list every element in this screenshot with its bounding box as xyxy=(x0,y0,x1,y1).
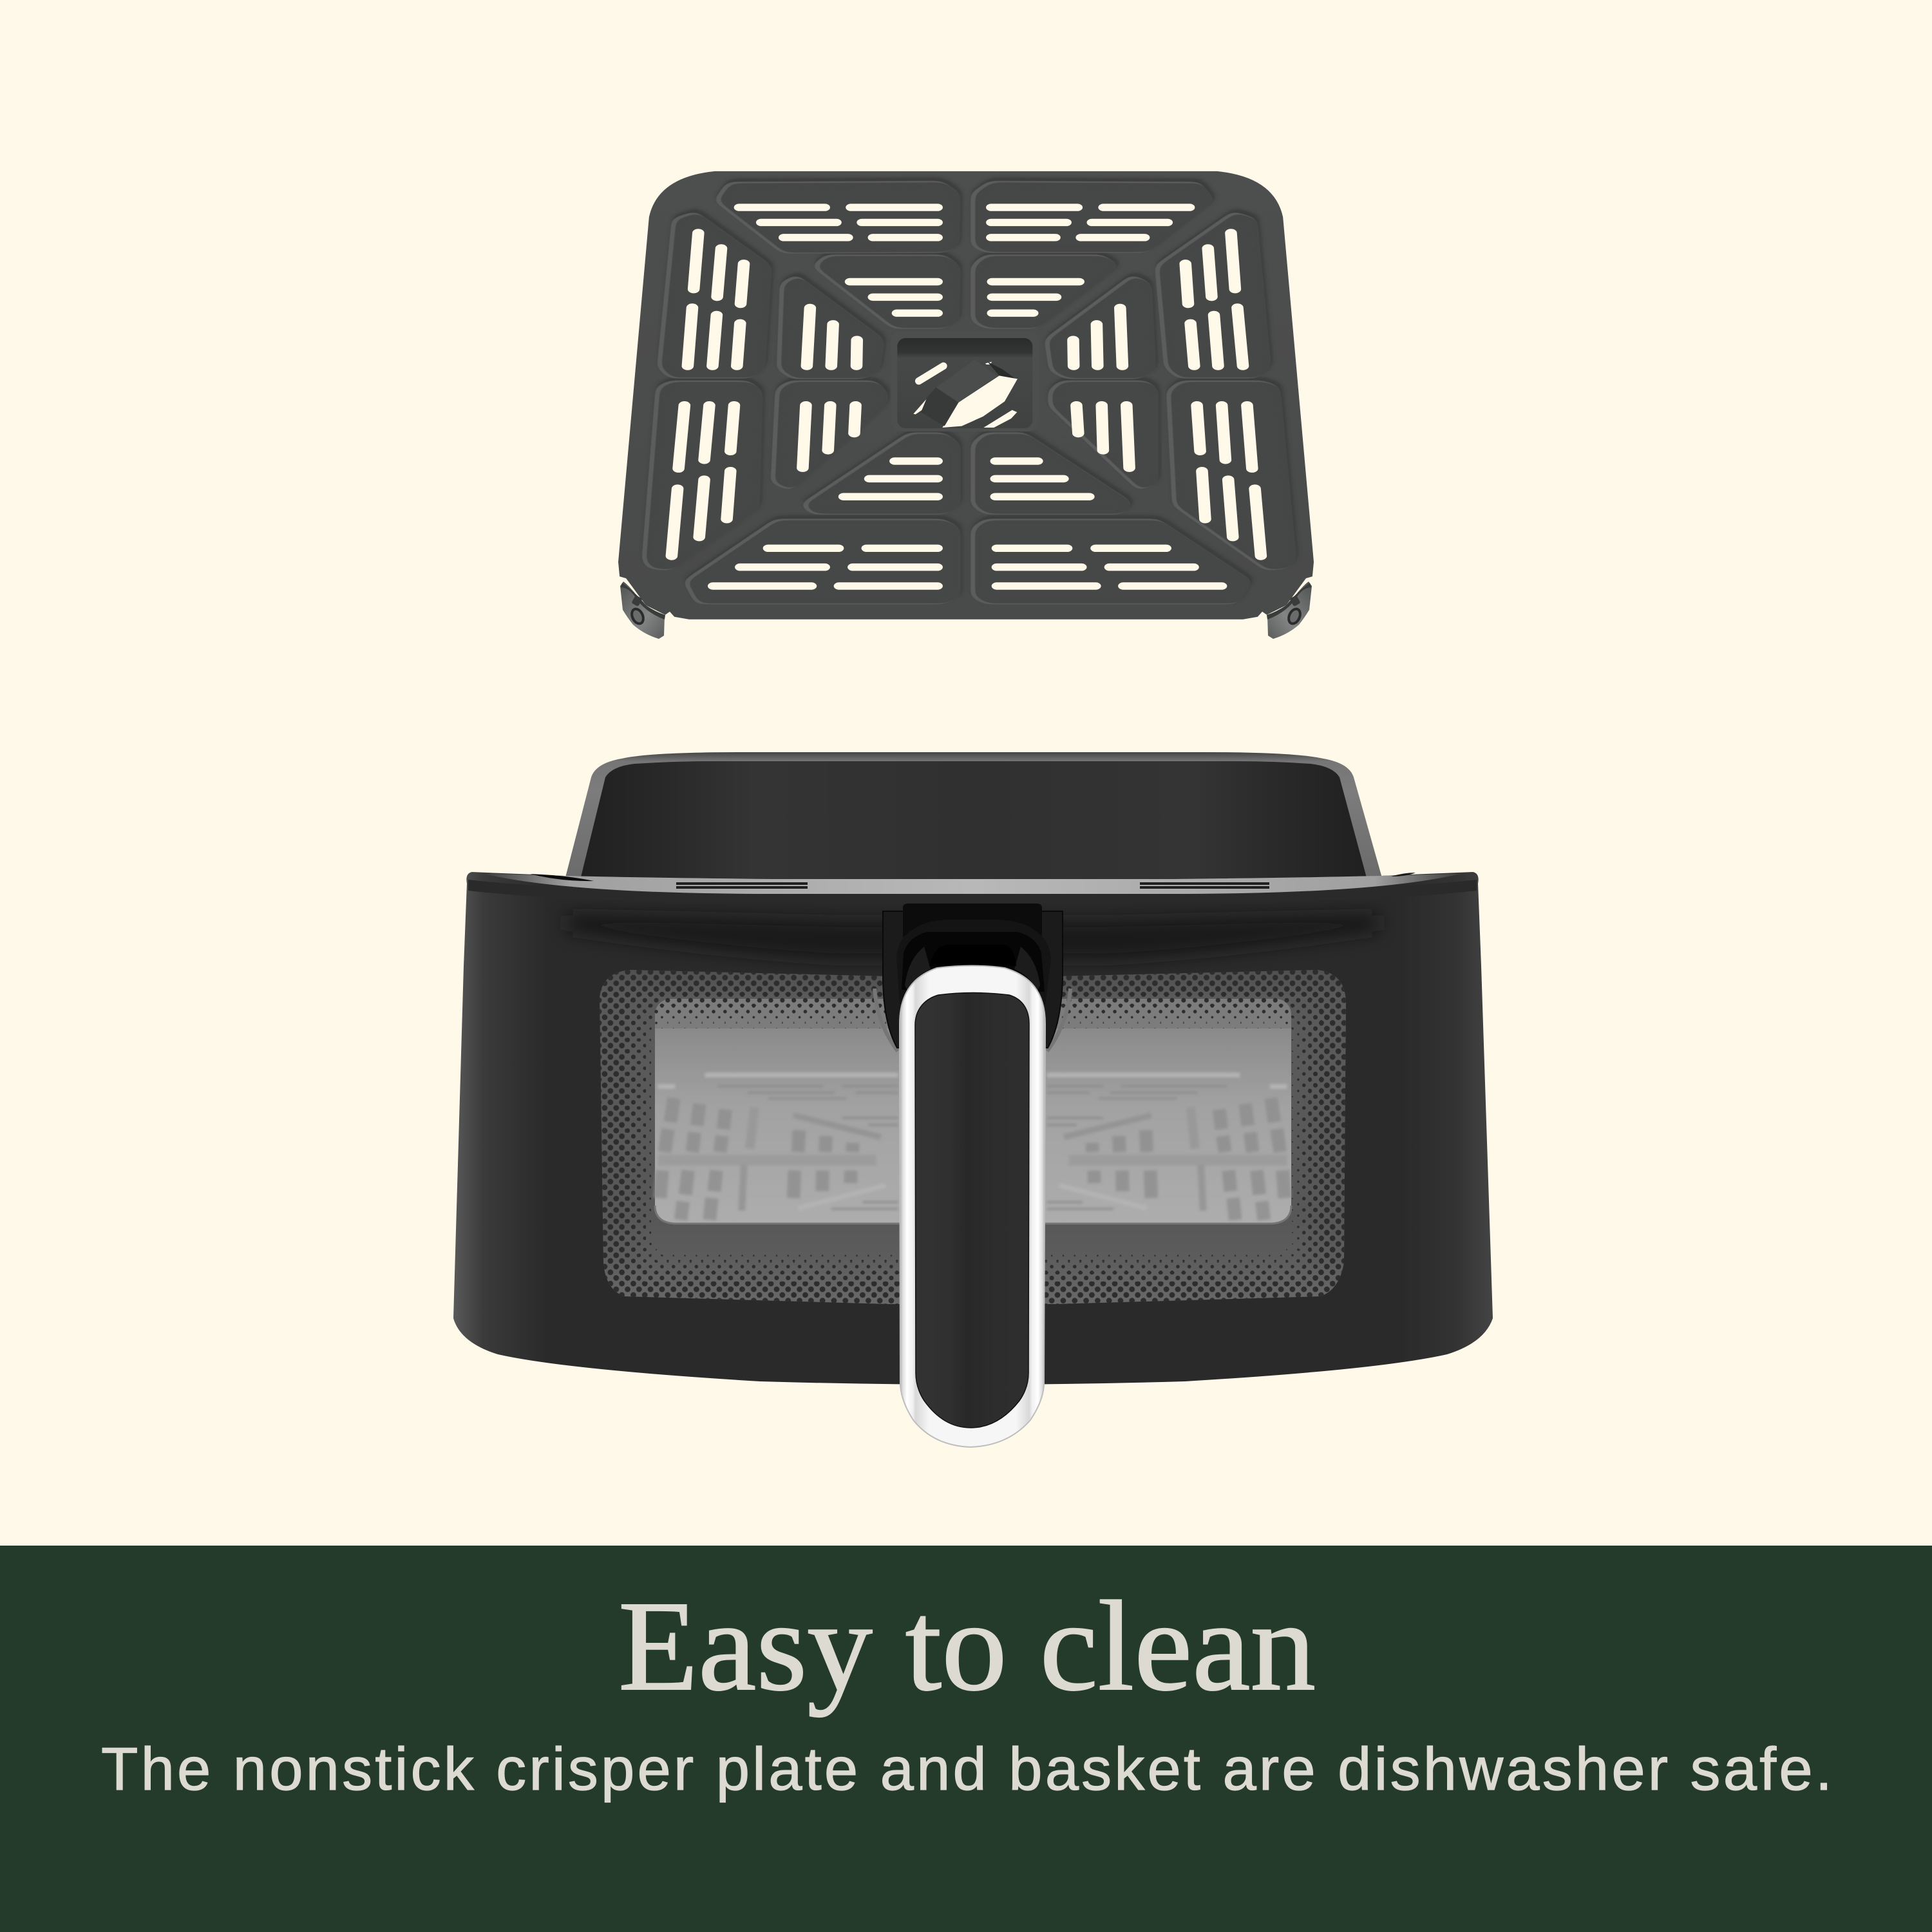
plate foot right xyxy=(1267,582,1312,639)
shadow groove under lip xyxy=(567,914,1378,960)
louver shadow xyxy=(987,362,1016,379)
plate reflection right xyxy=(1046,1075,1287,1220)
footer background xyxy=(0,1546,1932,1932)
light zone behind top dots xyxy=(655,999,1291,1028)
mount ring arcs xyxy=(875,989,1070,1051)
horizontal slots xyxy=(713,207,1222,586)
neck arch xyxy=(896,920,1051,1005)
fading mesh dots 4 xyxy=(651,1022,1295,1256)
plate silhouette xyxy=(618,171,1314,620)
glass window xyxy=(655,1028,1291,1224)
center cup with louver xyxy=(891,330,1039,431)
mount collar xyxy=(903,904,1042,937)
long lip slots xyxy=(676,884,1269,887)
neck core xyxy=(929,945,1016,966)
mesh base xyxy=(596,966,1349,1307)
plate foot left xyxy=(620,582,665,639)
lip slot left oval xyxy=(530,874,594,881)
air fryer basket xyxy=(453,752,1493,1447)
glass bottom edge xyxy=(655,1206,1291,1224)
cup rim xyxy=(891,330,1039,431)
louver opening xyxy=(942,375,1018,428)
lip band xyxy=(468,880,1477,904)
heading: Easy to clean xyxy=(618,1575,1316,1718)
outer mesh dots xyxy=(596,966,1349,1307)
recessed wells xyxy=(645,180,1296,603)
cup slots xyxy=(913,362,1017,428)
fading mesh dots 3 xyxy=(646,1014,1300,1262)
rear basket rim xyxy=(564,752,1383,882)
front housing xyxy=(453,872,1493,1385)
rear basket interior xyxy=(580,761,1368,882)
louver front face xyxy=(921,388,958,426)
chrome trim xyxy=(900,966,1045,1447)
handle mount xyxy=(875,904,1070,1051)
lip strip xyxy=(482,873,1463,894)
black grip xyxy=(915,993,1029,1428)
louver top face xyxy=(936,359,997,402)
cup recess xyxy=(897,338,1032,428)
handle xyxy=(900,966,1045,1447)
fading mesh dots 1 xyxy=(626,995,1320,1282)
subheading: The nonstick crisper plate and basket are dishwasher safe. xyxy=(101,1735,1832,1803)
neck inner xyxy=(902,932,1045,992)
plate body in reference-crop coordinates xyxy=(618,171,1314,620)
crisper plate xyxy=(618,171,1314,639)
neck cheeks xyxy=(905,947,1040,992)
window mesh xyxy=(596,966,1349,1307)
fading mesh dots 2 xyxy=(638,1006,1309,1272)
plate reflection left xyxy=(658,1075,898,1220)
vertical slots xyxy=(672,233,1261,556)
mount bracket xyxy=(883,911,1063,1048)
lip slots xyxy=(530,873,1416,887)
footer panel xyxy=(0,1546,1932,1932)
lip slot right oval xyxy=(1391,873,1416,876)
